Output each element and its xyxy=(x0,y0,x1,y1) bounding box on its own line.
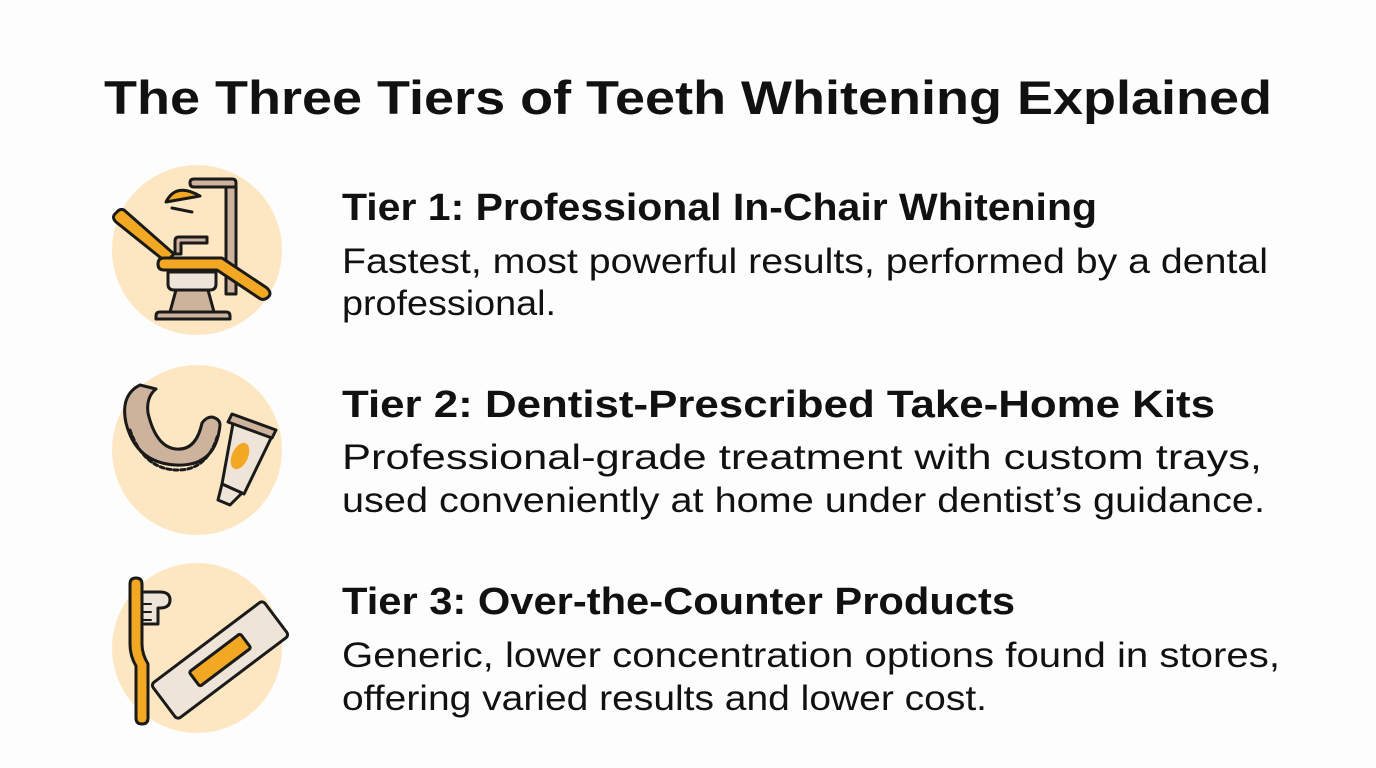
icon: dental chair xyxy=(112,165,282,335)
tier 3 description: offering varied results and lower cost. xyxy=(342,679,987,718)
tier 1 description xyxy=(342,242,1268,323)
title: The Three Tiers of Teeth Whitening Explained xyxy=(104,71,1272,124)
tier 2 heading: Tier 2: Dentist-Prescribed Take-Home Kits xyxy=(342,384,1215,426)
tier 1 heading: Tier 1: Professional In-Chair Whitening xyxy=(342,187,1097,229)
tier 3 heading: Tier 3: Over-the-Counter Products xyxy=(342,581,1015,623)
icon: trays and gel tube xyxy=(112,365,282,535)
icon: toothbrush and strip xyxy=(112,563,289,733)
tier 2 description xyxy=(342,438,1265,520)
tier 3 description xyxy=(342,636,1280,718)
tier 2 description: used conveniently at home under dentist’s guidance. xyxy=(342,481,1265,520)
tier 3 description: Generic, lower concentration options found in stores, xyxy=(342,636,1280,675)
tier 1 description: professional. xyxy=(342,284,556,323)
tier 1 description: Fastest, most powerful results, performed by a dental xyxy=(342,242,1268,281)
tier 2 description: Professional-grade treatment with custom trays, xyxy=(342,438,1262,477)
